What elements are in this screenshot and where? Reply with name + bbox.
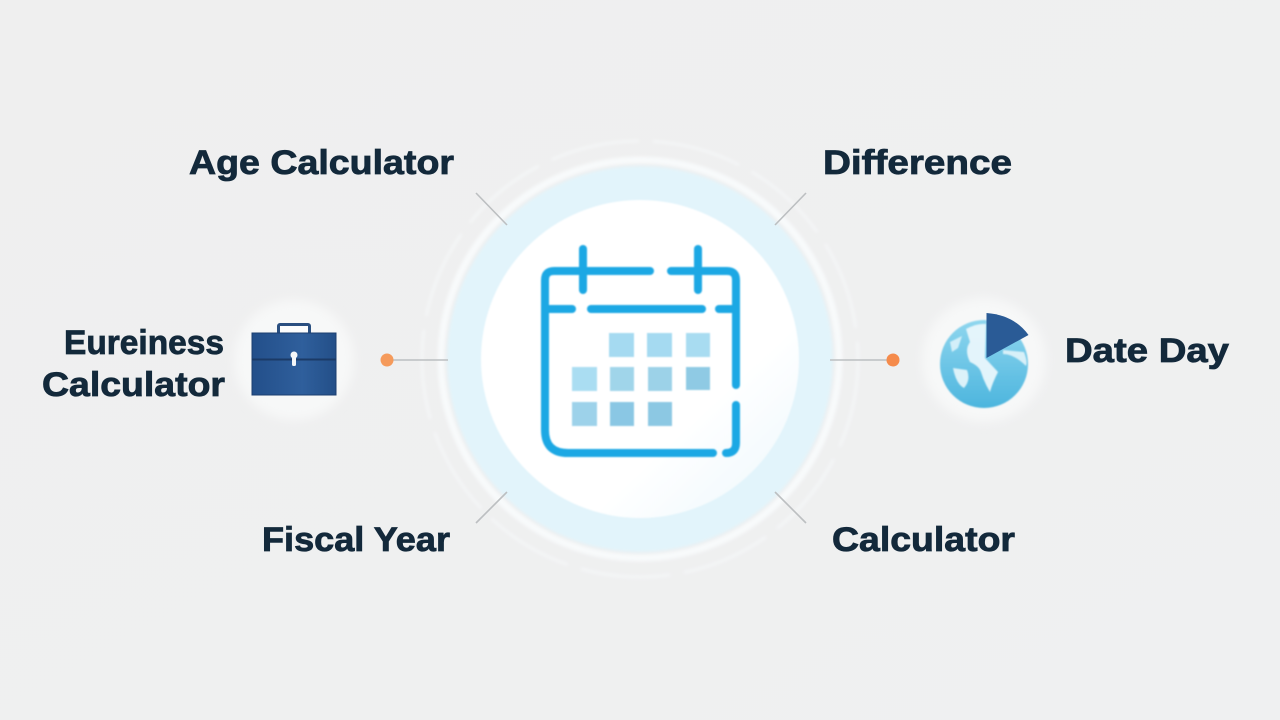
briefcase body <box>252 333 336 395</box>
label: Age Calculator: Age Calculator <box>189 144 454 182</box>
globe continents <box>950 324 1027 392</box>
calendar day squares <box>572 333 710 426</box>
label: Calculator: Calculator <box>832 521 1015 559</box>
label: Date Day: Date Day <box>1065 332 1229 370</box>
light blue ring <box>447 166 833 552</box>
briefcase keyhole <box>290 352 298 366</box>
connector: bottom right <box>775 492 806 523</box>
label: Business Calculator: Calculator <box>42 366 225 404</box>
briefcase halo <box>234 300 354 420</box>
connector: left with orange dot <box>380 354 448 366</box>
connector: right with orange dot <box>830 354 900 366</box>
briefcase handle <box>278 324 310 336</box>
connector: top right <box>775 193 806 225</box>
label: Business Calculator <box>42 324 225 404</box>
connector: top left <box>476 193 507 225</box>
central calendar medallion <box>422 141 858 577</box>
globe halo <box>922 298 1046 422</box>
pie slice <box>986 313 1028 358</box>
connector: bottom left <box>476 492 507 523</box>
globe sphere <box>940 320 1028 408</box>
label: Difference: Difference <box>823 144 1012 182</box>
icon: briefcase <box>234 300 354 420</box>
icon: globe with pie slice <box>922 298 1046 422</box>
calendar outline <box>545 249 736 453</box>
outer faint rings <box>422 141 858 577</box>
icon: calendar <box>545 249 736 453</box>
label: Fiscal Year: Fiscal Year <box>262 521 450 559</box>
label: Business Calculator: Eureiness <box>64 324 224 362</box>
white disc <box>481 200 799 518</box>
